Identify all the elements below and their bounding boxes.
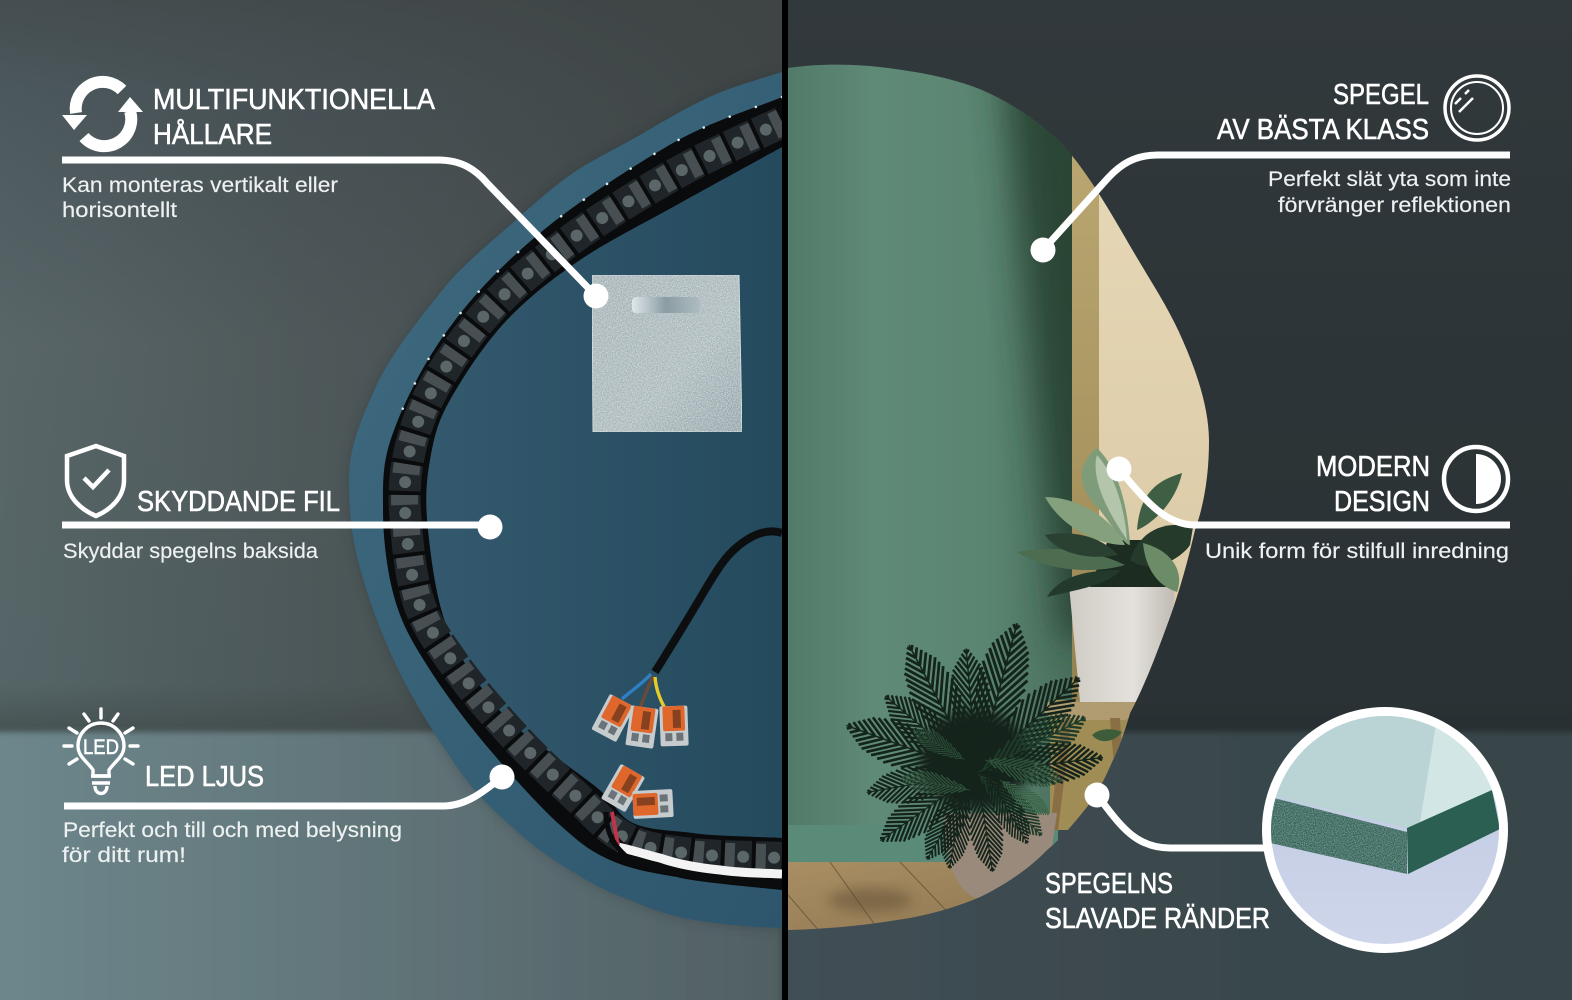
white plant pot — [1069, 585, 1175, 702]
stool — [1045, 702, 1135, 830]
leader line and dot — [1084, 782, 1265, 848]
leader line and dot — [1106, 456, 1510, 525]
description: Skyddar spegelns baksida — [63, 540, 318, 563]
icon: shield — [67, 446, 124, 516]
heading: LED LJUS — [145, 761, 264, 793]
leader line and dot — [62, 514, 502, 540]
power cable and wires — [622, 531, 782, 710]
skirting board — [788, 825, 1058, 862]
centre divider bar — [782, 0, 788, 1000]
icon: round mirror — [1445, 76, 1509, 140]
heading: HÅLLARE — [153, 118, 272, 151]
upper plant — [1017, 448, 1193, 597]
description: Perfekt slät yta som inte — [1268, 168, 1511, 191]
palm plant — [839, 617, 1106, 874]
heading: AV BÄSTA KLASS — [1217, 114, 1429, 146]
callout: LED light — [62, 709, 514, 867]
mirror back panel — [349, 72, 782, 928]
icon: sync arrows — [62, 82, 143, 146]
heading: SKYDDANDE FIL — [137, 486, 340, 518]
description: Perfekt och till och med belysning — [63, 819, 402, 842]
description: Unik form för stilfull inredning — [1205, 540, 1509, 563]
leader line and dot — [1030, 155, 1510, 262]
heading: MULTIFUNKTIONELLA — [153, 84, 436, 116]
LED strip tread segments — [405, 122, 782, 858]
leader line and dot — [62, 160, 608, 308]
description — [1268, 168, 1511, 217]
description — [62, 174, 338, 222]
leader line and dot — [64, 764, 514, 806]
heading — [1316, 451, 1430, 518]
green wall — [788, 60, 1072, 830]
icon: LED bulb — [64, 709, 138, 794]
icon: half circle — [1444, 447, 1508, 511]
wall shadow — [984, 92, 1072, 654]
white cable along the bottom — [606, 812, 782, 884]
heading — [1217, 79, 1429, 146]
heading: DESIGN — [1334, 486, 1430, 518]
wire connectors — [591, 694, 689, 819]
callout: modern design — [1106, 447, 1510, 563]
callout: protective film — [62, 446, 502, 563]
description: förvränger reflektionen — [1278, 194, 1511, 217]
LED dots along the edge — [393, 97, 782, 433]
heading: SPEGELNS — [1045, 868, 1173, 900]
heading: SPEGEL — [1333, 79, 1429, 111]
inset: glass edge close-up — [1260, 700, 1510, 953]
inner blue surface — [426, 147, 782, 838]
description: horisontellt — [62, 199, 177, 222]
hanging hook — [632, 297, 700, 313]
mirror front with room reflection — [788, 30, 1219, 932]
back panel outer shape — [349, 72, 782, 928]
heading: SLAVADE RÄNDER — [1045, 903, 1270, 935]
description: Kan monteras vertikalt eller — [62, 174, 338, 197]
heading: MODERN — [1316, 451, 1430, 483]
wooden floor — [788, 862, 1034, 930]
heading — [153, 84, 436, 151]
description: för ditt rum! — [62, 844, 186, 867]
callout: beveled edges — [1045, 700, 1510, 953]
heading — [1045, 868, 1270, 935]
callout: best class mirror — [1030, 76, 1511, 262]
wood panels — [1050, 156, 1209, 830]
palm pot — [943, 813, 1057, 900]
right background: wall and floor — [780, 0, 1572, 1000]
icon: LED bulb: LED — [83, 736, 119, 759]
left background: wall and floor — [0, 0, 790, 1000]
black LED channel — [383, 97, 782, 890]
callout: multifunctional holder — [62, 82, 608, 308]
back panel shadow — [432, 731, 770, 928]
description — [62, 819, 402, 867]
mounting plate — [592, 275, 742, 432]
